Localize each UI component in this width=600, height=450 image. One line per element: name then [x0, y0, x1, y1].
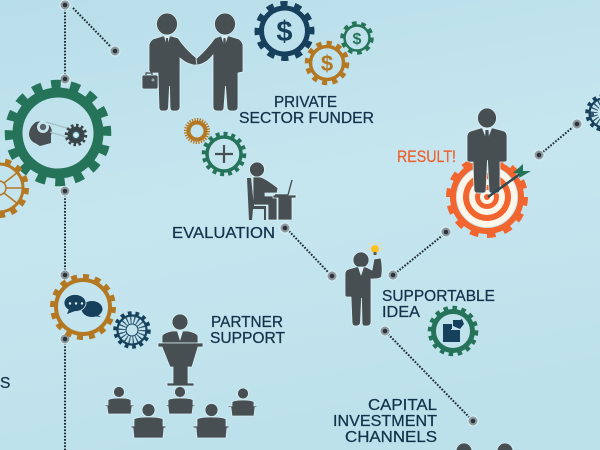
desk	[273, 195, 296, 220]
gear: bronze dollar	[307, 43, 347, 83]
gear: navy wheel at right edge	[587, 96, 600, 130]
gear: bronze chat	[52, 276, 114, 338]
icon: heads at bottom edge	[456, 443, 513, 450]
audience of five seated figures	[105, 386, 257, 438]
icon: businessman standing on target	[467, 108, 507, 193]
heading: private sector funder: SECTOR FUNDER	[239, 110, 374, 127]
gear: large green with head and cog	[3, 78, 113, 188]
heading: capital investment channels: CHANNELS	[345, 429, 437, 446]
gear: orange target with arrow	[450, 160, 524, 234]
heading: supportable idea: IDEA	[382, 304, 421, 321]
gear: bronze dollar: $	[321, 51, 333, 76]
icon: light bulb	[367, 242, 383, 255]
audience member 1	[105, 386, 134, 414]
audience member 3	[166, 386, 195, 414]
heading: supportable idea: SUPPORTABLE	[382, 288, 495, 305]
icon: man with raised arm	[345, 252, 382, 326]
laptop	[288, 180, 292, 195]
gear: green plus	[204, 134, 244, 174]
icon: puzzle pieces	[443, 319, 464, 342]
heading: partner support	[210, 314, 286, 347]
audience member 5	[228, 388, 257, 416]
gear: navy dollar: $	[276, 16, 293, 48]
left man	[149, 13, 199, 111]
briefcase	[142, 73, 158, 89]
gear: navy dollar	[254, 1, 315, 61]
heading: capital investment channels: INVESTMENT	[333, 413, 438, 430]
icon: head	[29, 122, 52, 146]
heading: evaluation: EVALUATION	[172, 225, 275, 242]
heading: capital investment channels: CAPITAL	[368, 397, 437, 414]
heading: private sector funder	[239, 94, 374, 127]
gear: green dollar	[342, 23, 372, 53]
heading: result: RESULT!	[397, 148, 456, 166]
icon: small cog	[66, 126, 86, 144]
icon: arrow in target	[488, 164, 531, 197]
gear: bronze cut off at left edge	[0, 160, 26, 216]
gear: navy wheel	[115, 313, 149, 347]
heading: supportable idea	[382, 288, 495, 321]
gear: small bronze sun	[186, 120, 208, 142]
gear: green dollar: $	[353, 31, 362, 48]
heading: partner support: PARTNER	[211, 314, 283, 331]
icon: speaker at podium	[158, 314, 203, 386]
audience member 4	[193, 404, 229, 438]
heading: private sector funder: PRIVATE	[274, 94, 337, 111]
text fragment at left edge: S	[0, 375, 10, 392]
audience member 2	[131, 404, 166, 438]
icon: belt	[46, 122, 70, 138]
heading: partner support: SUPPORT	[210, 330, 286, 347]
right man	[196, 13, 243, 111]
heading: capital investment channels	[333, 397, 438, 446]
chair	[247, 178, 266, 220]
gear: green puzzle	[430, 308, 476, 354]
icon: speech bubbles	[64, 294, 102, 317]
icon: two businessmen shaking hands	[142, 13, 243, 111]
icon: person at desk with laptop	[247, 162, 296, 220]
